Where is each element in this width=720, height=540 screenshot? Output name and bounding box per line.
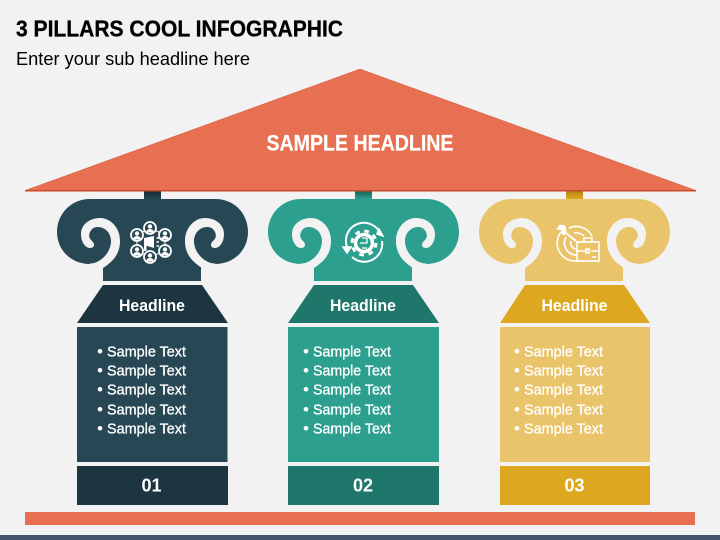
pillar 1 body: • bbox=[97, 380, 103, 399]
pillar 3 body: Sample Text bbox=[524, 344, 603, 360]
roof with headline: SAMPLE HEADLINE bbox=[266, 130, 454, 156]
pillar 2 body: • bbox=[303, 361, 309, 380]
pillar 1 headline bbox=[77, 285, 228, 323]
pillar 3 body: Sample Text bbox=[524, 382, 603, 398]
pillar 1 number bbox=[77, 466, 228, 505]
pillar 2 body: Sample Text bbox=[313, 344, 391, 360]
pillar 2 body: • bbox=[303, 400, 309, 419]
pillar 3 number: 03 bbox=[564, 476, 585, 496]
pillar 3 body: • bbox=[514, 400, 520, 419]
icon: megaphone network bbox=[131, 222, 171, 263]
pillar 3 body: Sample Text bbox=[524, 422, 603, 438]
pillar 1 bbox=[57, 190, 248, 505]
pillar 1 body: • bbox=[97, 419, 103, 438]
pillar 2 body bbox=[288, 327, 439, 462]
pillar 1 stem bbox=[144, 190, 161, 199]
pillar 3 body: • bbox=[514, 361, 520, 380]
pillar 3 body: • bbox=[514, 380, 520, 399]
pillar 3 body bbox=[500, 327, 650, 462]
icon: gear with cycle arrows bbox=[343, 223, 383, 262]
pillar 2 body: • bbox=[303, 342, 309, 361]
pillar 2 headline bbox=[288, 285, 439, 323]
pillar 3 stem bbox=[566, 190, 583, 199]
pillar 1 body: Sample Text bbox=[107, 364, 186, 380]
pillar 1 body: • bbox=[97, 342, 103, 361]
pillar 1 body: Sample Text bbox=[107, 422, 186, 438]
pillar 2 number: 02 bbox=[353, 476, 373, 496]
pillar 1 body bbox=[77, 327, 228, 462]
base bar bbox=[25, 512, 695, 525]
pillar 1 capital bbox=[57, 199, 248, 283]
pillar 3 headline: Headline bbox=[542, 297, 608, 315]
pillar 3 headline bbox=[500, 285, 650, 323]
pillar 2 body: Sample Text bbox=[313, 382, 391, 398]
pillar 3 capital bbox=[479, 199, 670, 283]
pillar 3 body: • bbox=[514, 342, 520, 361]
subtitle: Enter your sub headline here bbox=[16, 48, 250, 69]
pillar 1 body: • bbox=[97, 400, 103, 419]
pillar 1 headline: Headline bbox=[119, 297, 185, 315]
pillar 2 number bbox=[288, 466, 439, 505]
pillar 2 body: Sample Text bbox=[313, 422, 391, 438]
pillar 2 bbox=[268, 190, 459, 505]
pillar 3 body: • bbox=[514, 419, 520, 438]
pillar 1 body: Sample Text bbox=[107, 344, 186, 360]
pillar 2 capital bbox=[268, 199, 459, 283]
pillar 2 headline: Headline bbox=[330, 297, 396, 315]
pillar 2 body: Sample Text bbox=[313, 402, 391, 418]
pillar 3 number bbox=[500, 466, 650, 505]
title: 3 PILLARS COOL INFOGRAPHIC bbox=[16, 16, 343, 42]
icon: target and briefcase bbox=[557, 225, 599, 261]
pillar 2 body: • bbox=[303, 380, 309, 399]
pillar 1 body: Sample Text bbox=[107, 402, 186, 418]
footer strip bbox=[0, 535, 720, 540]
roof with headline bbox=[25, 69, 696, 192]
pillar 2 body: Sample Text bbox=[313, 364, 391, 380]
pillar 2 body: • bbox=[303, 419, 309, 438]
pillar 3 body: Sample Text bbox=[524, 402, 603, 418]
pillar 1 body: Sample Text bbox=[107, 382, 186, 398]
pillar 3 bbox=[479, 190, 670, 505]
pillar 1 number: 01 bbox=[141, 476, 162, 496]
pillar 3 body: Sample Text bbox=[524, 364, 603, 380]
pillar 1 body: • bbox=[97, 361, 103, 380]
pillar 2 stem bbox=[355, 190, 372, 199]
